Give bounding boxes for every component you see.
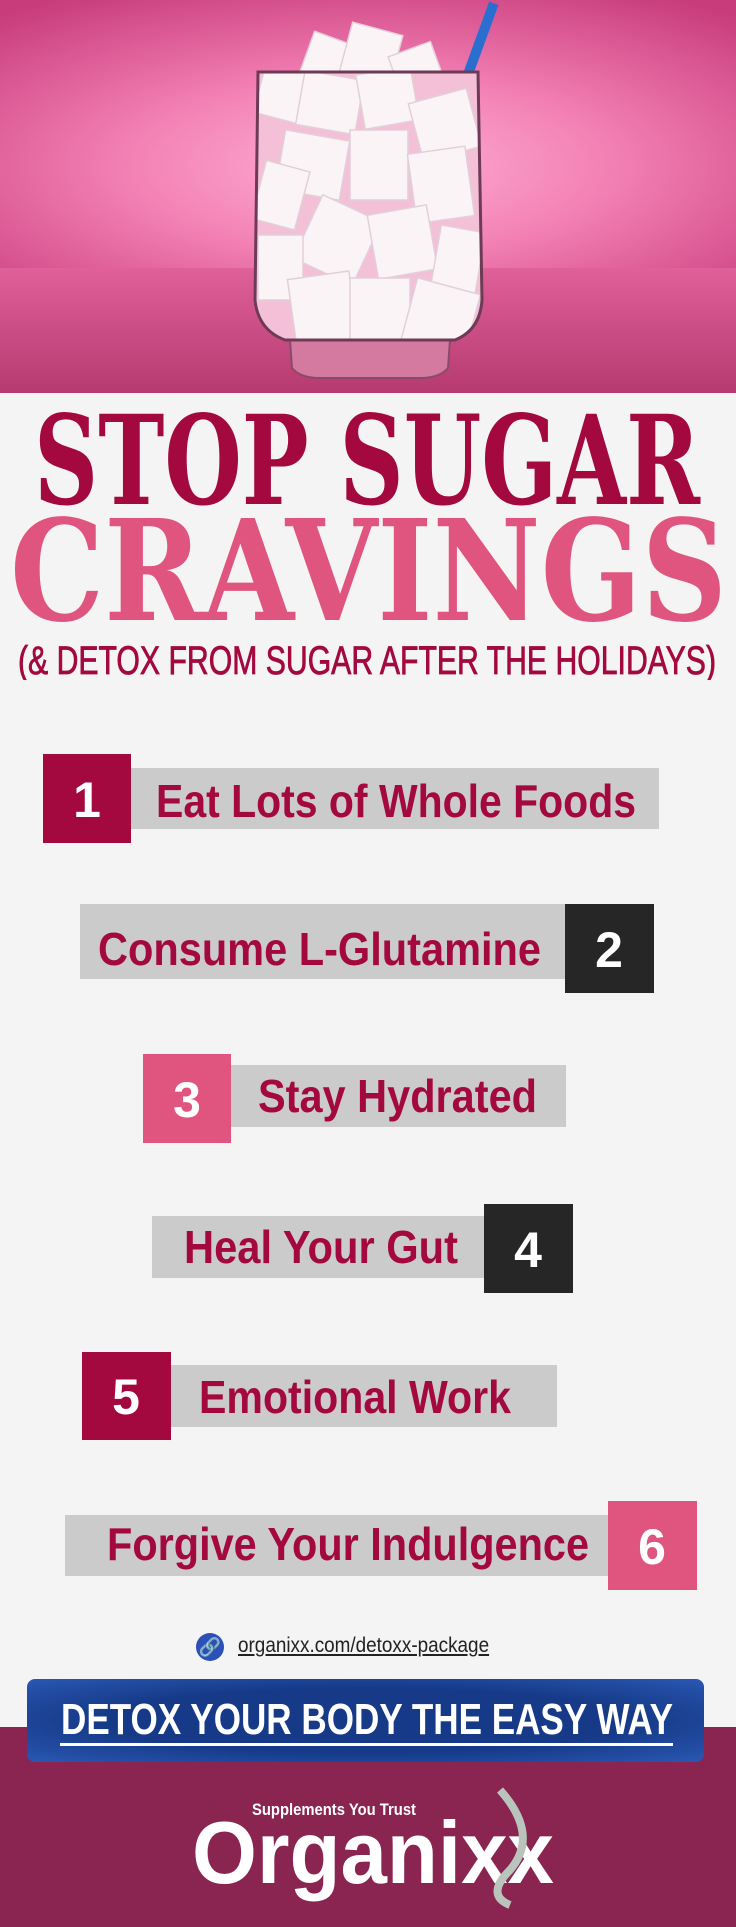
step 3 (143, 1054, 566, 1143)
link with icon: organixx.com/detoxx-package (238, 1634, 489, 1657)
step 5 (82, 1352, 557, 1440)
step 1: Eat Lots of Whole Foods (156, 775, 636, 827)
step 5: 5 (112, 1369, 140, 1425)
step 1 (43, 754, 659, 843)
step 6: Forgive Your Indulgence (107, 1518, 589, 1570)
step 3: 3 (173, 1072, 201, 1128)
step 3: Stay Hydrated (258, 1070, 537, 1122)
step 4: 4 (514, 1222, 542, 1278)
step 4: Heal Your Gut (184, 1221, 458, 1273)
icon: link (196, 1633, 224, 1661)
step 2: Consume L-Glutamine (98, 923, 541, 975)
step 6 (65, 1501, 697, 1590)
logo: Supplements You Trust (252, 1800, 416, 1819)
glass (251, 2, 499, 378)
button (27, 1679, 704, 1762)
step 6: 6 (638, 1519, 666, 1575)
step 1: 1 (73, 772, 101, 828)
logo: Organixx (192, 1803, 554, 1902)
step 2 (80, 904, 654, 993)
hero photo: glass of sugar cubes (0, 0, 736, 393)
icon: link: 🔗 (199, 1637, 221, 1657)
step 4 (152, 1204, 573, 1293)
footer band (0, 1727, 736, 1927)
steps list (43, 754, 697, 1590)
step 2: 2 (595, 922, 623, 978)
step 5: Emotional Work (199, 1371, 511, 1423)
